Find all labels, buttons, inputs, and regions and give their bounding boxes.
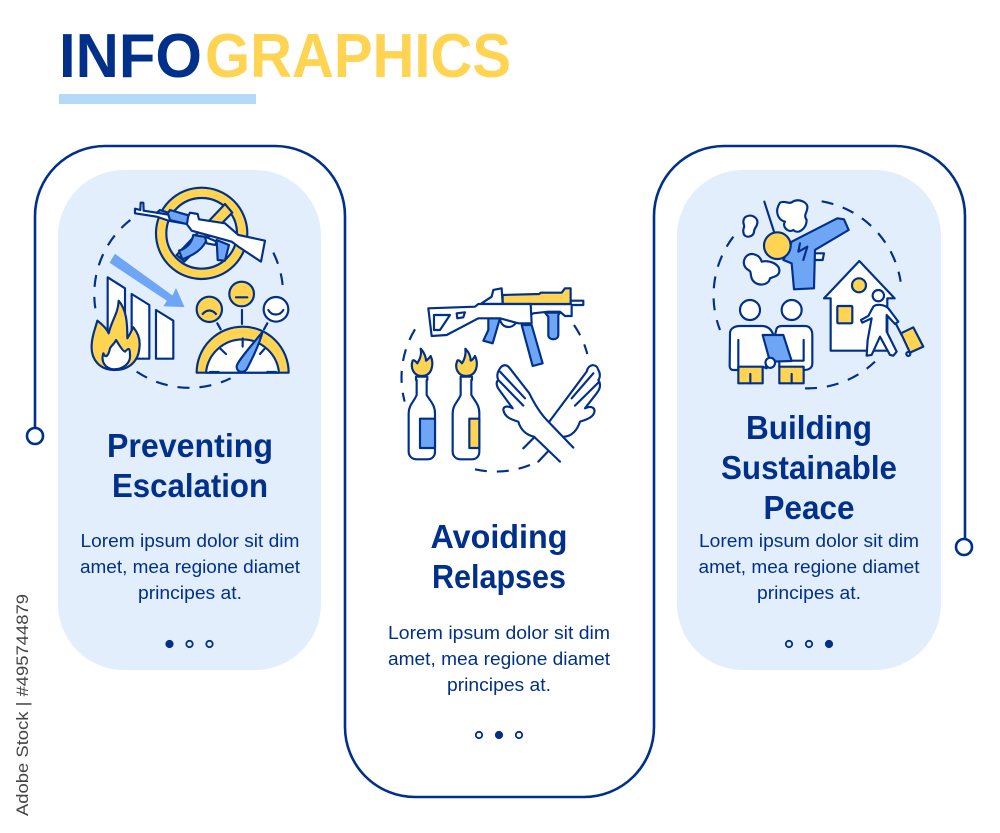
text: right description xyxy=(698,531,920,603)
stock credit: Adobe Stock | #495744879 xyxy=(13,594,32,816)
icon: house xyxy=(824,261,895,351)
panel: left background xyxy=(58,170,321,670)
heading: preventing escalation: Escalation xyxy=(112,467,268,504)
text: left description: Lorem ipsum dolor sit dim xyxy=(80,531,300,551)
text: middle description: amet, mea regione diamet xyxy=(388,649,610,669)
icon: prohibition sign xyxy=(156,188,247,279)
title underline xyxy=(59,94,256,104)
text: middle description xyxy=(388,623,610,695)
icon: bar chart xyxy=(108,277,173,359)
heading: avoiding relapses: Avoiding xyxy=(430,518,568,555)
text: middle description: principes at. xyxy=(447,675,551,695)
title xyxy=(59,22,511,91)
title: GRAPHICS xyxy=(205,22,511,91)
icon: pistol xyxy=(764,202,849,289)
icon: walking person with suitcase xyxy=(861,290,923,356)
title: INFO xyxy=(59,22,202,91)
text: left description: principes at. xyxy=(138,583,242,603)
icon: avoiding relapses xyxy=(402,288,600,472)
icon: building sustainable peace xyxy=(714,200,923,388)
heading: preventing escalation xyxy=(107,427,273,504)
text: middle description: Lorem ipsum dolor sit dim xyxy=(388,623,610,643)
icon: submachine gun xyxy=(428,288,583,366)
heading: building sustainable peace: Peace xyxy=(764,489,854,526)
icon: rifle xyxy=(135,203,265,262)
pagination: left xyxy=(166,641,213,647)
text: right description: amet, mea regione diamet xyxy=(698,557,920,577)
heading: avoiding relapses xyxy=(430,518,568,595)
icon: mood gauge xyxy=(197,282,289,373)
icon: smoke clouds xyxy=(743,200,807,285)
text: right description: Lorem ipsum dolor sit dim xyxy=(699,531,919,551)
dashed ring xyxy=(402,325,587,472)
pagination: middle xyxy=(476,732,522,738)
dashed ring xyxy=(94,220,283,388)
icon: fire xyxy=(92,301,140,370)
pagination: right xyxy=(786,641,832,647)
heading: building sustainable peace: Building xyxy=(746,409,872,446)
heading: building sustainable peace xyxy=(721,409,897,526)
icon: preventing escalation xyxy=(92,188,289,388)
heading: building sustainable peace: Sustainable xyxy=(721,449,897,486)
heading: preventing escalation: Preventing xyxy=(107,427,273,464)
icon: two people with document xyxy=(730,300,812,383)
timeline outline xyxy=(27,146,972,797)
icon: crossed hands xyxy=(497,365,600,462)
panel: right background xyxy=(677,170,941,670)
heading: avoiding relapses: Relapses xyxy=(432,558,566,595)
text: left description: amet, mea regione diamet xyxy=(80,557,300,577)
dashed ring xyxy=(714,201,901,388)
text: right description: principes at. xyxy=(757,583,861,603)
icon: molotov bottles xyxy=(409,349,479,459)
icon: falling arrow xyxy=(110,254,184,307)
text: left description xyxy=(80,531,300,603)
